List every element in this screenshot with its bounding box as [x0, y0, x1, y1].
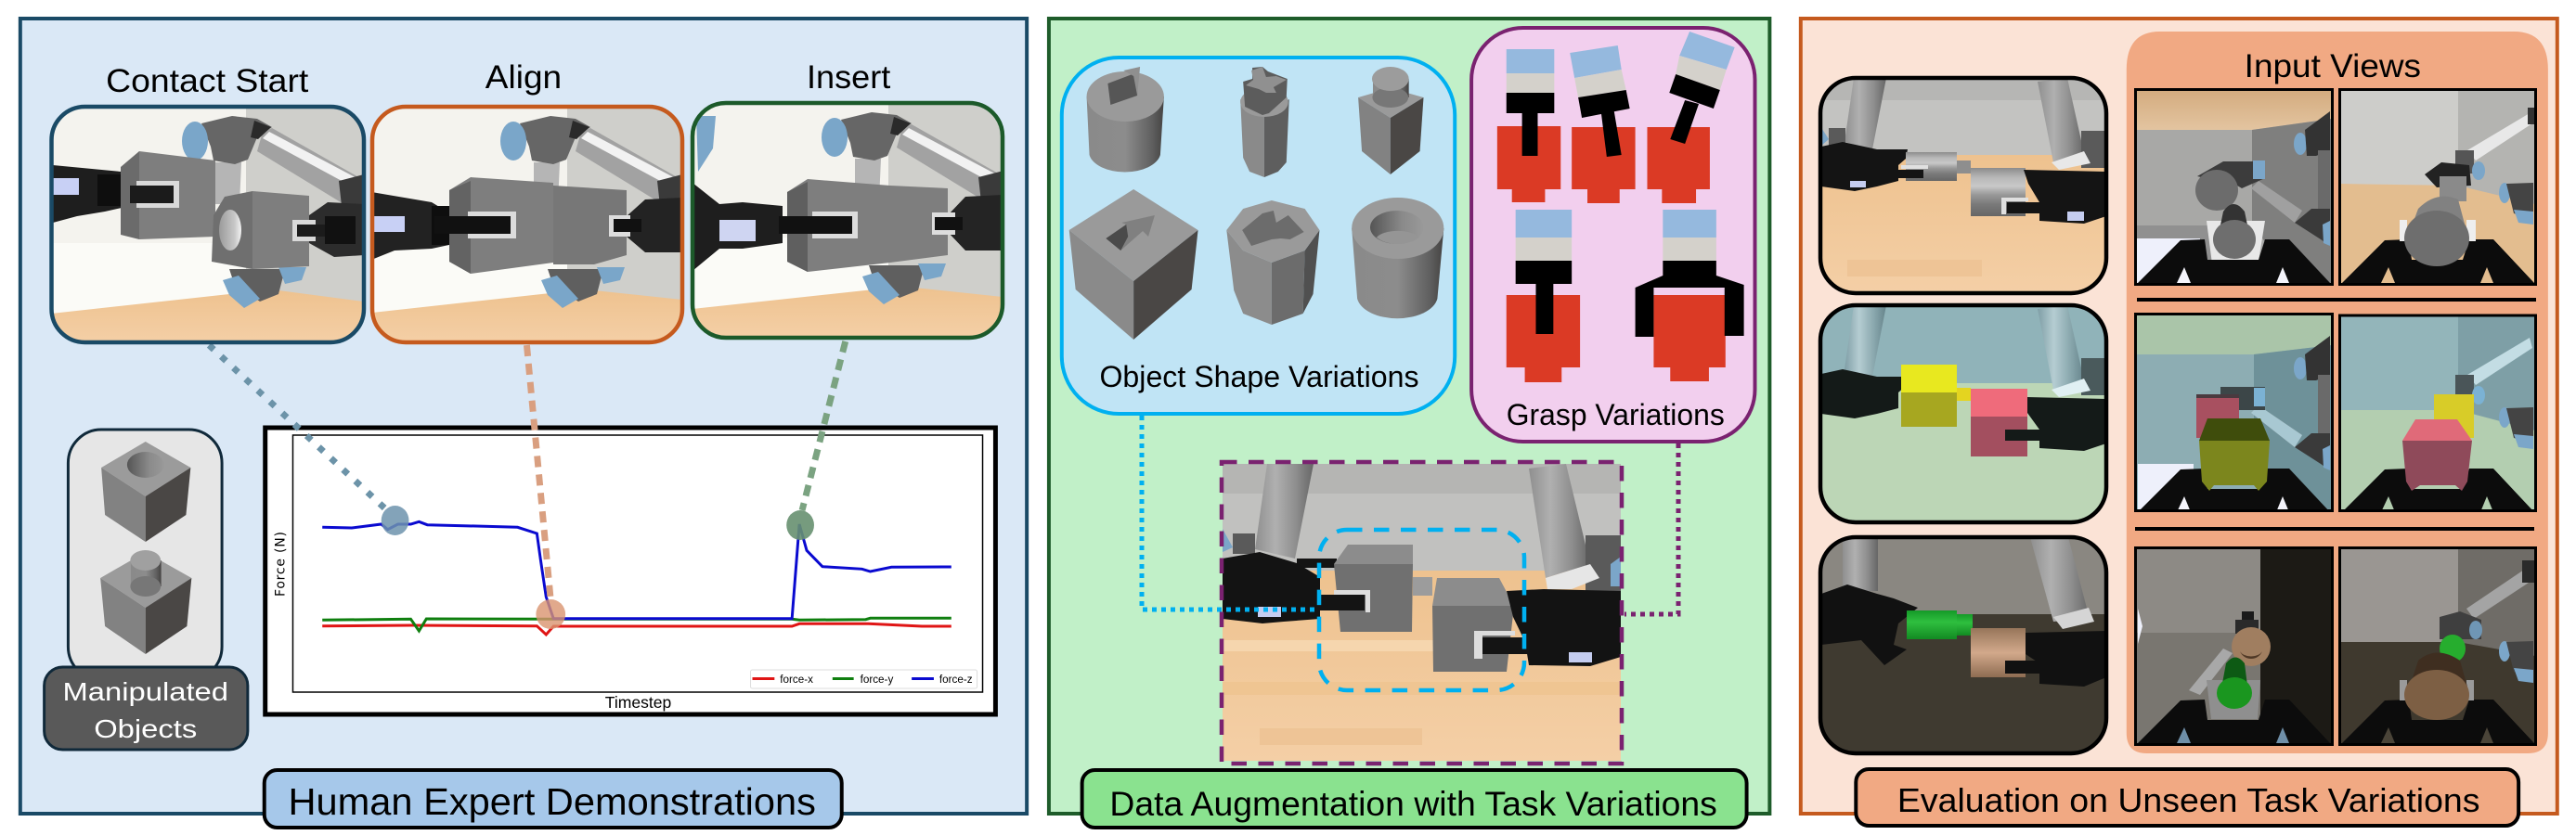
scene image: evaluation dark environment: [1820, 537, 2106, 753]
view: dark wrist camera right: [2339, 547, 2536, 744]
icon: cube with peg: [100, 550, 191, 654]
chart: force over timestep: [265, 428, 995, 714]
label: grasp variations: Grasp Variations: [1507, 398, 1725, 431]
icon: tilted left grasp: [1647, 32, 1735, 203]
icon: octagonal cross peg: [1240, 67, 1289, 177]
view: colored wrist camera left: [2135, 314, 2332, 512]
label: manipulated objects: [45, 667, 248, 750]
panel: data augmentation: [1049, 19, 1769, 814]
scene image: evaluation colored blocks: [1820, 305, 2106, 522]
label: manipulated objects: Objects: [94, 714, 197, 743]
icon: wide grasp: [1636, 210, 1744, 381]
icon: cube with hole: [101, 442, 190, 542]
icon: cylinder with round hole: [1352, 198, 1443, 318]
connector: contact start to chart: [209, 345, 408, 535]
title: human expert demonstrations: Human Expert Demonstrations: [289, 780, 816, 823]
title: data augmentation with task variations: Data Augmentation with Task Variations: [1109, 785, 1717, 823]
title: evaluation on unseen task variations: [1856, 769, 2518, 826]
legend: force-x: [780, 673, 813, 686]
view: dark wrist camera left: [2135, 547, 2332, 744]
title: evaluation on unseen task variations: Evaluation on Unseen Task Variations: [1897, 782, 2480, 819]
line: force-y: [322, 618, 951, 631]
view: colored wrist camera right: [2339, 315, 2536, 512]
view: default wrist camera right: [2339, 89, 2536, 284]
x axis label: Timestep: [605, 693, 671, 712]
y axis label: Force (N): [274, 532, 289, 597]
divider: [2137, 298, 2536, 302]
icon: octagon with cross hole: [1226, 200, 1319, 325]
connector: align to chart: [526, 345, 565, 629]
icon: cylinder with slot peg: [1087, 67, 1164, 172]
title: human expert demonstrations: [265, 770, 842, 828]
title: data augmentation with task variations: [1082, 770, 1747, 828]
connector: shape variations to scene: [1142, 416, 1318, 610]
scene image: evaluation default: [1820, 78, 2106, 293]
heading: input views: Input Views: [2245, 48, 2421, 84]
connector: grasp variations to scene: [1625, 443, 1678, 614]
scene image: align: [371, 107, 682, 342]
line: force-z: [322, 521, 951, 619]
icon: thin grasp: [1507, 210, 1580, 382]
connector: insert to chart: [786, 341, 846, 540]
label: object shape variations: Object Shape Variations: [1099, 360, 1419, 393]
highlight: object region: [1319, 530, 1524, 690]
label: manipulated objects: Manipulated: [62, 677, 228, 706]
panel: manipulated objects: [45, 430, 248, 750]
scene image: contact start: [51, 107, 364, 342]
divider: [2135, 527, 2534, 531]
panel: human expert demonstrations: [20, 19, 1027, 828]
heading: contact start: Contact Start: [106, 63, 309, 99]
panel: grasp variations: [1471, 28, 1755, 442]
legend: force-z: [939, 673, 973, 686]
icon: tilted right grasp: [1570, 45, 1636, 203]
icon: centered grasp: [1497, 49, 1560, 202]
scene image: insert: [693, 103, 1003, 338]
icon: square with cylinder peg: [1358, 67, 1424, 174]
heading: insert: Insert: [807, 59, 891, 96]
scene image: augmented insertion: [1222, 462, 1622, 764]
icon: square with arrow hole: [1069, 189, 1198, 340]
line: force-x: [322, 623, 951, 635]
panel: input views: [2127, 32, 2548, 753]
legend: force-y: [861, 673, 893, 686]
heading: align: Align: [485, 59, 562, 96]
view: default wrist camera left: [2135, 89, 2332, 284]
panel: object shape variations: [1062, 58, 1455, 414]
legend: [751, 670, 977, 688]
panel: evaluation: [1801, 19, 2557, 826]
